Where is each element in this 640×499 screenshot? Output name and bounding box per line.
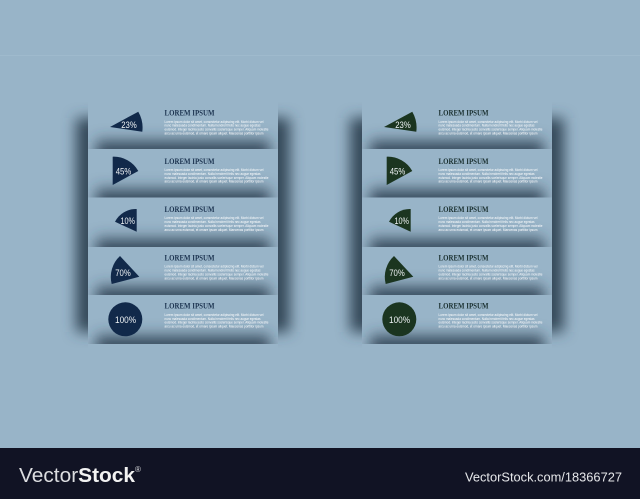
body text: Lorem ipsum dolor sit amet, consectetur adipiscing elit. Morbi dictum vel [164,313,264,317]
body text: euismod. Integer lacinia justo convallis scelerisque semper. Aliquam molestie [438,128,542,132]
row 2: 45% [88,156,278,198]
footer bar [0,448,640,499]
icon: 23% sector [384,112,417,132]
body text: nunc malesuada condimentum. Nulla hendrerit felis nec augue egestas [164,269,261,273]
body text: arcu ac urna euismod, et ornare ipsum aliquet. Maecenas porttitor ipsum [164,325,264,329]
body text: euismod. Integer lacinia justo convallis scelerisque semper. Aliquam molestie [438,224,542,228]
body text: euismod. Integer lacinia justo convallis scelerisque semper. Aliquam molestie [164,272,268,276]
logo: registered mark: ® [135,465,141,474]
body text [164,313,268,329]
label: 10%: 10% [120,215,135,226]
body text: euismod. Integer lacinia justo convallis scelerisque semper. Aliquam molestie [164,224,268,228]
body text: Lorem ipsum dolor sit amet, consectetur adipiscing elit. Morbi dictum vel [164,265,264,269]
body text: nunc malesuada condimentum. Nulla hendrerit felis nec augue egestas [438,172,535,176]
row 2: 45% [362,156,552,198]
body text [164,120,268,136]
label: 23%: 23% [121,119,137,130]
row 1: 23% [88,110,278,149]
body text: Lorem ipsum dolor sit amet, consectetur adipiscing elit. Morbi dictum vel [438,313,538,317]
body text: arcu ac urna euismod, et ornare ipsum aliquet. Maecenas porttitor ipsum [438,180,538,184]
panel: left column [76,96,290,357]
body text: Lorem ipsum dolor sit amet, consectetur adipiscing elit. Morbi dictum vel [164,216,264,220]
body text: euismod. Integer lacinia justo convallis scelerisque semper. Aliquam molestie [164,176,268,180]
body text: euismod. Integer lacinia justo convallis scelerisque semper. Aliquam molestie [438,176,542,180]
body text: nunc malesuada condimentum. Nulla hendrerit felis nec augue egestas [164,124,261,128]
icon: 100% circle [382,302,416,336]
body text [438,265,542,280]
body text: arcu ac urna euismod, et ornare ipsum aliquet. Maecenas porttitor ipsum [438,228,538,232]
body text [438,168,542,184]
icon: 100% circle [108,302,142,336]
body text: arcu ac urna euismod, et ornare ipsum aliquet. Maecenas porttitor ipsum [164,228,264,232]
label: 10%: 10% [394,215,409,226]
icon: 45% sector [113,157,138,185]
heading: LOREM IPSUM [438,254,489,262]
heading: LOREM IPSUM [164,205,215,214]
body text: arcu ac urna euismod, et ornare ipsum aliquet. Maecenas porttitor ipsum [438,325,538,329]
body text: nunc malesuada condimentum. Nulla hendrerit felis nec augue egestas [438,317,535,321]
icon: 10% sector [115,209,137,232]
body text: Lorem ipsum dolor sit amet, consectetur adipiscing elit. Morbi dictum vel [438,216,538,220]
body text [438,216,542,232]
label: 100%: 100% [389,314,410,325]
icon: 70% sector [111,256,139,284]
heading: LOREM IPSUM [438,205,489,214]
body text: nunc malesuada condimentum. Nulla hendrerit felis nec augue egestas [164,220,261,224]
row 3: 10% [362,206,552,247]
heading: LOREM IPSUM [438,108,489,118]
body text: euismod. Integer lacinia justo convallis scelerisque semper. Aliquam molestie [438,321,542,325]
body text [438,313,542,329]
image id url: VectorStock.com/18366727 [465,470,622,484]
row 5: 100% [362,302,552,344]
label: 70%: 70% [115,267,131,278]
body text [164,265,268,280]
row 4: 70% [88,255,278,295]
label: 100%: 100% [115,314,136,325]
icon: 10% sector [389,209,411,232]
icon: 70% sector [385,256,413,284]
label: 70%: 70% [389,267,405,278]
heading: LOREM IPSUM [164,302,215,311]
row 1: 23% [362,110,552,149]
label: 45%: 45% [390,166,405,176]
body text: Lorem ipsum dolor sit amet, consectetur adipiscing elit. Morbi dictum vel [438,265,538,269]
body text: nunc malesuada condimentum. Nulla hendrerit felis nec augue egestas [438,124,535,128]
body text: nunc malesuada condimentum. Nulla hendrerit felis nec augue egestas [164,172,261,176]
body text [164,168,268,184]
body text: Lorem ipsum dolor sit amet, consectetur adipiscing elit. Morbi dictum vel [438,168,538,172]
heading: LOREM IPSUM [164,157,215,166]
row 3: 10% [88,206,278,247]
body text: arcu ac urna euismod, et ornare ipsum aliquet. Maecenas porttitor ipsum [438,276,538,280]
body text: Lorem ipsum dolor sit amet, consectetur adipiscing elit. Morbi dictum vel [164,168,264,172]
body text: nunc malesuada condimentum. Nulla hendrerit felis nec augue egestas [438,220,535,224]
body text: arcu ac urna euismod, et ornare ipsum aliquet. Maecenas porttitor ipsum [164,132,264,136]
body text: euismod. Integer lacinia justo convallis scelerisque semper. Aliquam molestie [438,272,542,276]
body text: arcu ac urna euismod, et ornare ipsum aliquet. Maecenas porttitor ipsum [164,180,264,184]
body text: Lorem ipsum dolor sit amet, consectetur adipiscing elit. Morbi dictum vel [164,120,264,124]
body text: euismod. Integer lacinia justo convallis scelerisque semper. Aliquam molestie [164,321,268,325]
body text: Lorem ipsum dolor sit amet, consectetur adipiscing elit. Morbi dictum vel [438,120,538,124]
label: 23%: 23% [395,119,411,130]
body text: nunc malesuada condimentum. Nulla hendrerit felis nec augue egestas [164,317,261,321]
body text: arcu ac urna euismod, et ornare ipsum aliquet. Maecenas porttitor ipsum [438,132,538,136]
heading: LOREM IPSUM [164,108,215,118]
heading: LOREM IPSUM [438,302,489,311]
panel: right column [350,96,564,357]
icon: 23% sector [110,112,143,132]
heading: LOREM IPSUM [438,157,489,166]
row 5: 100% [88,302,278,344]
body text: arcu ac urna euismod, et ornare ipsum aliquet. Maecenas porttitor ipsum [164,276,264,280]
logo: VectorStock: VectorStock [19,464,136,487]
label: 45%: 45% [116,166,131,176]
body text [164,216,268,232]
body text [438,120,542,136]
panel shadow [76,118,290,332]
body text: nunc malesuada condimentum. Nulla hendrerit felis nec augue egestas [438,269,535,273]
heading: LOREM IPSUM [164,254,215,262]
icon: 45% sector [387,157,412,185]
panel shadow [350,118,564,332]
row 4: 70% [362,255,552,295]
body text: euismod. Integer lacinia justo convallis scelerisque semper. Aliquam molestie [164,128,268,132]
